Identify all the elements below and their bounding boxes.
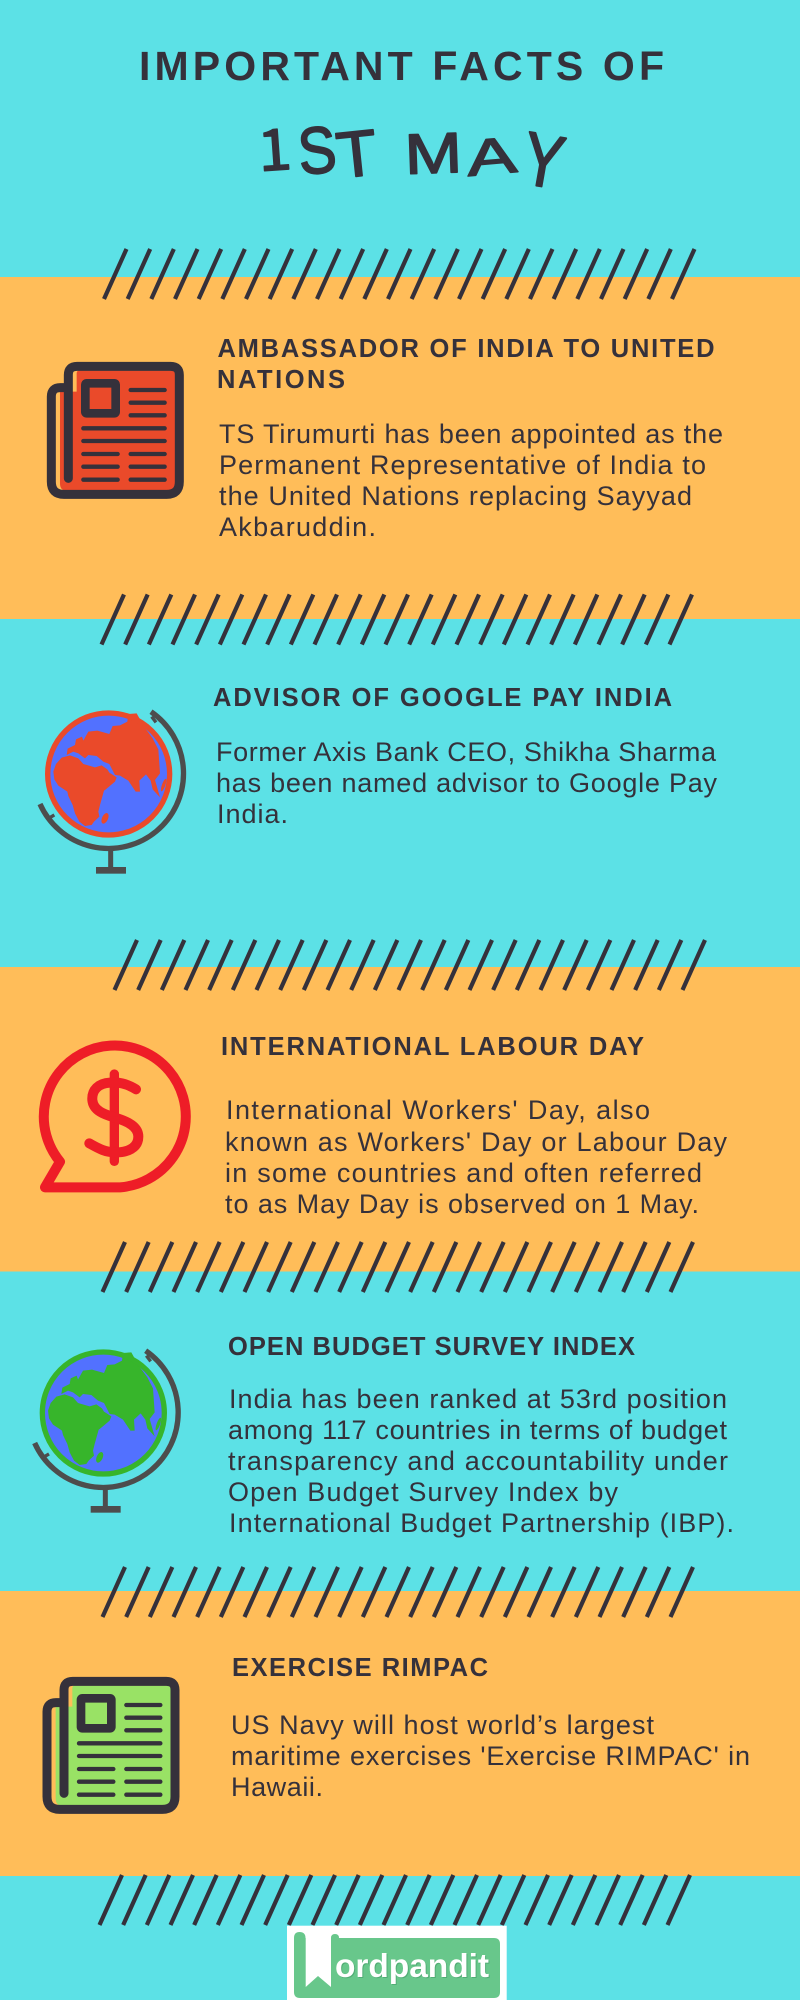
icon: globe green <box>35 1351 178 1513</box>
title line: Important Facts of: IMPORTANT FACTS OF <box>139 43 664 89</box>
body text: Akbaruddin. <box>219 512 376 542</box>
title: 1st May handwritten: M <box>404 122 463 187</box>
body text: has been named advisor to Google Pay <box>216 768 718 798</box>
body text <box>225 1095 728 1219</box>
body text: TS Tirumurti has been appointed as the <box>219 419 723 449</box>
icon: dollar speech bubble <box>44 1046 186 1187</box>
heading: ADVISOR OF GOOGLE PAY INDIA <box>213 684 672 712</box>
body text <box>228 1384 734 1538</box>
heading: OPEN BUDGET SURVEY INDEX <box>228 1333 635 1361</box>
body text: among 117 countries in terms of budget <box>228 1415 727 1445</box>
panel: Exercise RIMPAC <box>0 1591 800 1876</box>
heading: AMBASSADOR OF INDIA TO UNITED <box>218 335 714 363</box>
body text: International Budget Partnership (IBP). <box>229 1508 734 1538</box>
body text: Open Budget Survey Index by <box>228 1477 618 1507</box>
body text: transparency and accountability under <box>228 1446 728 1476</box>
panel: Advisor of Google Pay India <box>0 619 800 967</box>
title: 1st May handwritten <box>255 103 570 206</box>
heading: EXERCISE RIMPAC <box>232 1654 488 1682</box>
title: 1st May handwritten: S <box>295 113 339 190</box>
heading: NATIONS <box>217 366 345 394</box>
body text: the United Nations replacing Sayyad <box>219 481 692 511</box>
panel: Open Budget Survey Index <box>0 1272 800 1591</box>
body text: International Workers' Day, also <box>226 1095 650 1125</box>
body text: maritime exercises 'Exercise RIMPAC' in <box>231 1741 750 1771</box>
body text: India has been ranked at 53rd position <box>229 1384 727 1414</box>
icon: globe red <box>40 712 184 874</box>
body text <box>216 737 718 829</box>
icon: newspaper red <box>51 366 179 494</box>
body text: Hawaii. <box>231 1772 323 1802</box>
body text: Permanent Representative of India to <box>219 450 706 480</box>
body text: Former Axis Bank CEO, Shikha Sharma <box>216 737 717 767</box>
heading: INTERNATIONAL LABOUR DAY <box>221 1033 644 1061</box>
title: 1st May handwritten: Y <box>516 117 570 206</box>
panel: header <box>0 0 800 277</box>
body text: in some countries and often referred <box>225 1158 702 1188</box>
logo text: ordpandit <box>335 1948 489 1985</box>
heading <box>217 335 714 394</box>
panel: Ambassador of India to United Nations <box>0 277 800 619</box>
body text <box>231 1710 750 1802</box>
body text: to as May Day is observed on 1 May. <box>225 1189 699 1219</box>
title: 1st May handwritten: A <box>464 126 519 187</box>
logo: Wordpandit <box>287 1926 507 2000</box>
body text: US Navy will host world’s largest <box>231 1710 654 1740</box>
body text: India. <box>217 799 288 829</box>
title: 1st May handwritten: 1 <box>255 103 294 188</box>
title: 1st May handwritten: T <box>333 116 380 192</box>
body text <box>219 419 723 542</box>
panel: International Labour Day <box>0 967 800 1272</box>
icon: newspaper green <box>47 1681 175 1809</box>
body text: known as Workers' Day or Labour Day <box>225 1127 728 1157</box>
